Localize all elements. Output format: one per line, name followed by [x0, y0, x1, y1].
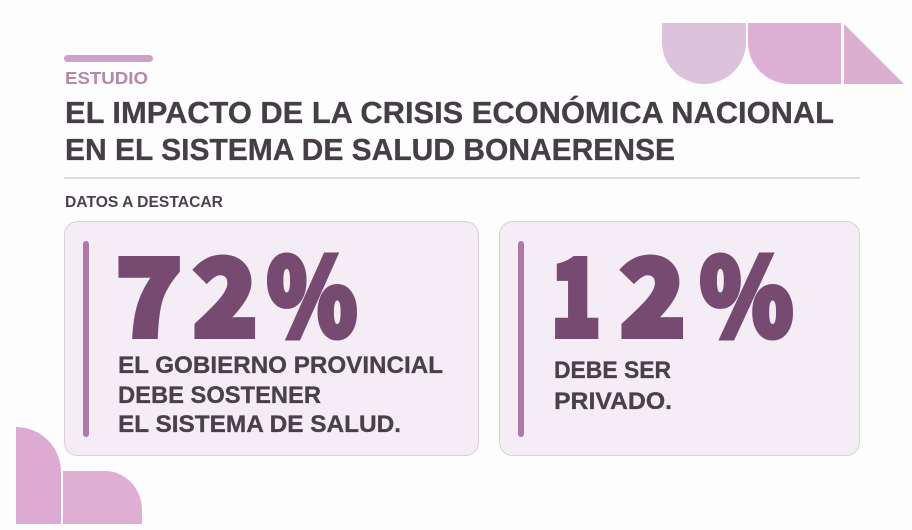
accent bar — [64, 55, 153, 62]
description: 72%: EL GOBIERNO PROVINCIAL — [118, 352, 443, 379]
stat: 72%: % — [267, 213, 357, 367]
panel: 72% — [64, 213, 478, 456]
stat: 12%: 1 — [551, 213, 601, 367]
section label: DATOS A DESTACAR — [65, 194, 223, 211]
description: 72% — [118, 352, 443, 438]
stat: 72% — [116, 213, 357, 367]
stat: 12%: 2 — [620, 213, 686, 367]
accent bar: 12% — [518, 241, 524, 437]
title: EN EL SISTEMA DE SALUD BONAERENSE — [65, 132, 675, 167]
description: 72%: DEBE SOSTENER — [118, 382, 321, 409]
panel: 12% — [500, 213, 860, 456]
accent bar: 72% — [83, 241, 89, 437]
stat: 72%: 2 — [193, 213, 258, 367]
stat: 12% — [551, 213, 793, 367]
eyebrow: estudio: ESTUDIO — [65, 68, 148, 88]
description: 12%: PRIVADO. — [554, 388, 672, 415]
title: EL IMPACTO DE LA CRISIS ECONÓMICA NACIONAL — [65, 94, 834, 130]
description: 12%: DEBE SER — [554, 357, 671, 384]
decorative shapes: top right — [662, 23, 904, 84]
title — [65, 94, 834, 167]
description: 72%: EL SISTEMA DE SALUD. — [118, 411, 401, 438]
stat: 12%: % — [700, 213, 793, 367]
decorative shapes: bottom left — [16, 427, 142, 524]
description: 12% — [554, 357, 672, 415]
stat: 72%: 7 — [116, 213, 182, 367]
